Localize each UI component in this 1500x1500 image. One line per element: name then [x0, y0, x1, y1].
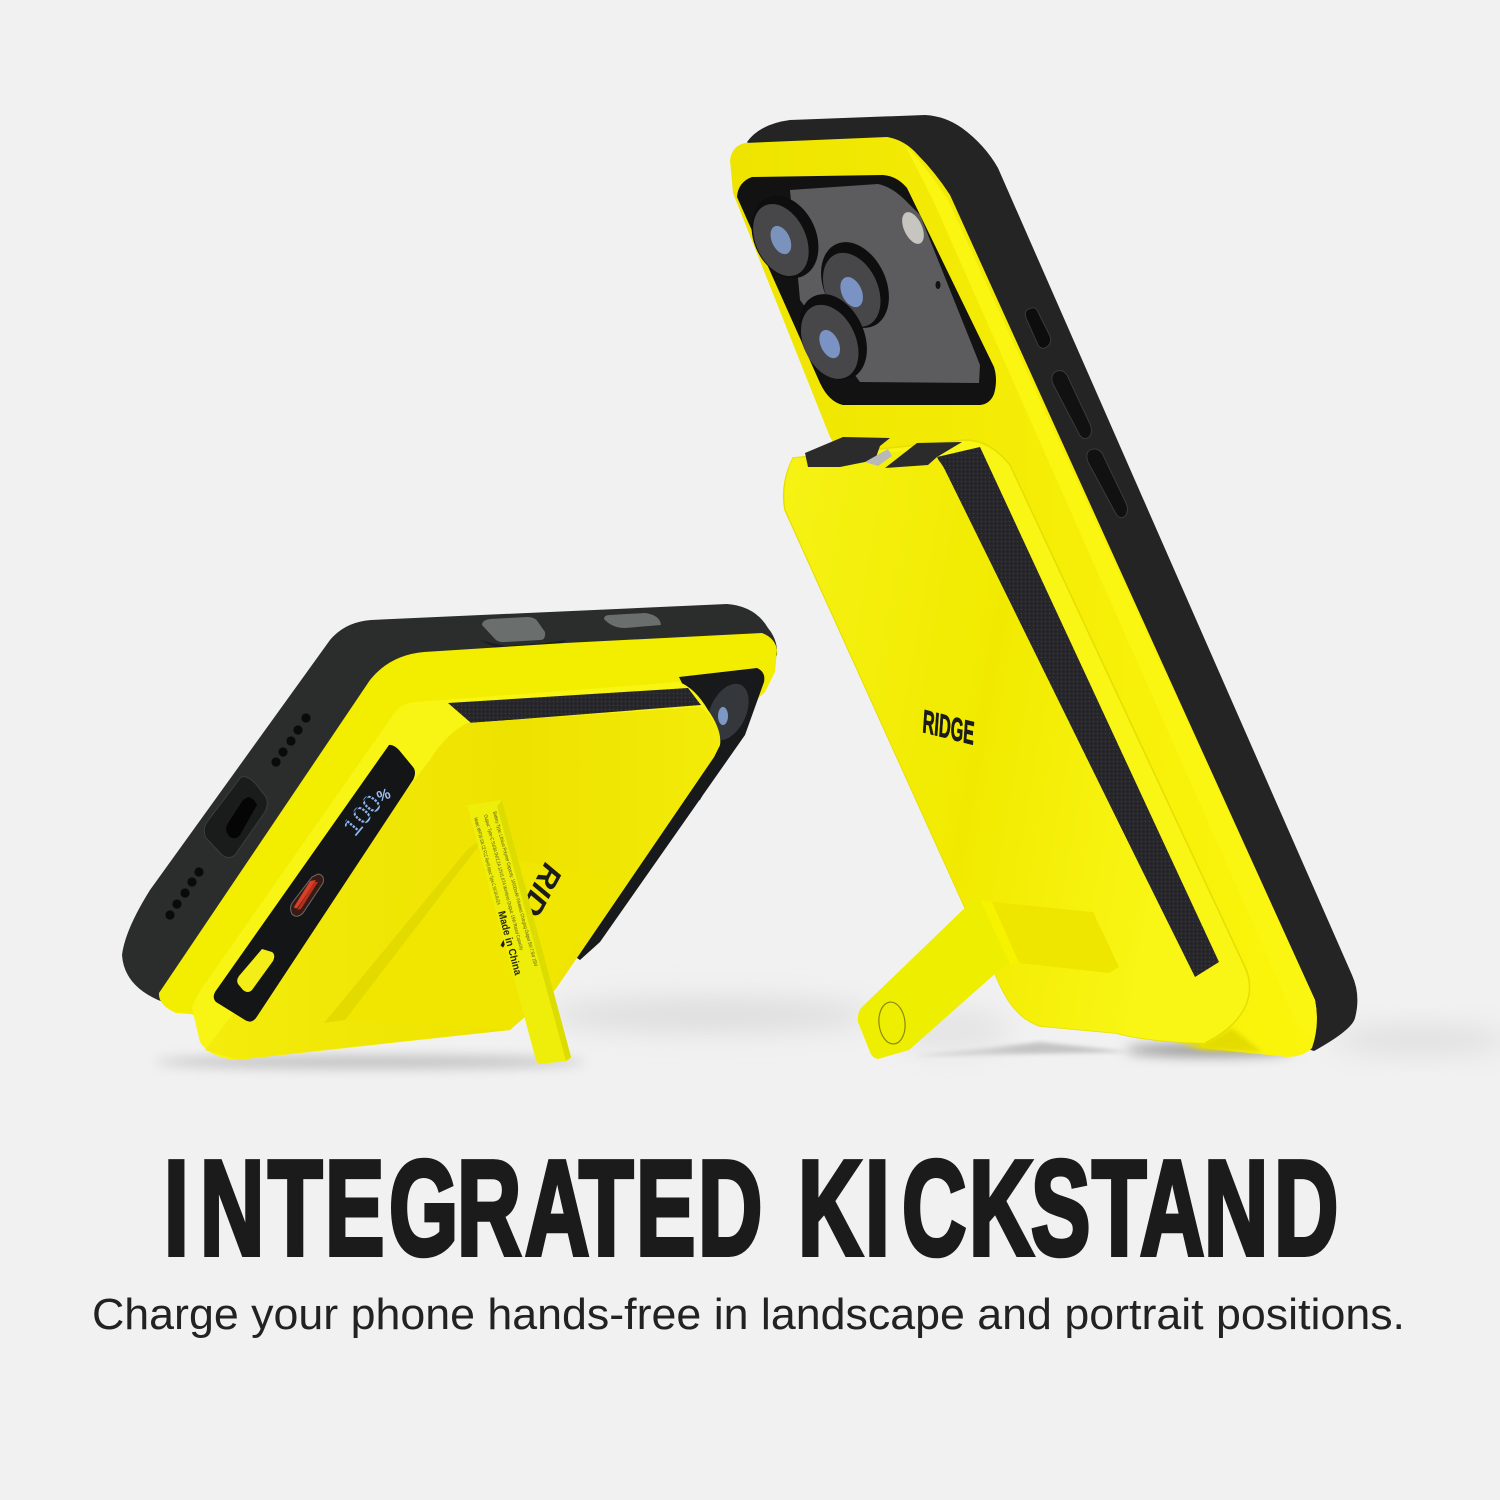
side button 2	[1052, 371, 1092, 439]
outer rim	[784, 440, 1250, 1043]
power button	[237, 949, 274, 992]
charging port	[204, 777, 267, 858]
yellow case back	[730, 137, 1317, 1057]
kickstand	[858, 900, 1016, 1059]
top button 2	[604, 613, 661, 628]
brand logo: RIDGE	[922, 703, 975, 752]
camera lens	[699, 677, 757, 747]
side button 1	[1025, 308, 1051, 348]
speaker holes top	[271, 713, 311, 767]
kickstand hinge	[980, 900, 1019, 964]
top lens	[739, 185, 831, 289]
mesh band	[448, 688, 701, 723]
USB-C glow	[294, 880, 316, 908]
landscape device: phone case	[122, 604, 777, 1040]
top face	[205, 707, 720, 1060]
lens blue	[718, 707, 728, 725]
top button 1	[482, 617, 545, 642]
front face	[785, 450, 1207, 1043]
landscape device: power bank	[192, 682, 720, 1060]
kickstand recess shading	[324, 835, 487, 1023]
regulatory fine print: Model: MFP20-10K CE FCC RoHS Input: Type-C 5V/3A 9V/2A	[472, 817, 501, 906]
button surround	[480, 640, 566, 650]
bank outer shell	[192, 682, 720, 1060]
side button 3	[1087, 449, 1128, 518]
yellow case back	[159, 633, 777, 1040]
regulatory fine print	[472, 811, 538, 967]
port opening	[226, 797, 257, 838]
title: INTEGRATED KICKSTAND	[164, 1133, 1338, 1284]
camera corner	[565, 668, 764, 960]
kickstand circle	[877, 1001, 907, 1045]
landscape device: kickstand	[467, 800, 571, 1064]
percent sign: %	[375, 785, 393, 806]
black case	[122, 604, 777, 1012]
display panel	[214, 745, 415, 1022]
clip connector	[865, 449, 892, 466]
regulatory fine print: Output: Type-C 5V/3A 9V/2.2A 12V/1.67A Wireless Output: 15W Rated Capacity	[482, 814, 524, 951]
clip 2	[885, 442, 962, 468]
floor shadows	[155, 999, 1500, 1068]
regulatory fine print: Battery Type: Lithium Polymer Capacity: 10000mAh Wireless Charging Output 5W 7.5W 15W	[491, 811, 538, 967]
portrait device: camera module	[737, 175, 996, 405]
lower front highlight	[345, 850, 620, 1030]
mesh band	[937, 447, 1219, 977]
subtitle: Charge your phone hands-free in landscape and portrait positions.	[92, 1290, 1405, 1339]
lower lens	[786, 283, 880, 391]
portrait device: power bank	[784, 437, 1250, 1059]
made in China label: Made in China	[495, 910, 524, 977]
USB-C port	[290, 874, 323, 916]
microphone dot	[936, 281, 940, 289]
flash	[898, 209, 928, 247]
logo partly behind stand: RIDGE	[495, 855, 566, 963]
middle lens	[808, 231, 902, 339]
battery digits: 100	[336, 789, 388, 841]
portrait device: phone case	[730, 115, 1357, 1057]
battery contact shadow on case	[1180, 1028, 1262, 1052]
kickstand recess	[992, 902, 1119, 973]
speaker holes bottom	[165, 867, 204, 920]
camera glass	[790, 184, 980, 383]
black case side	[747, 115, 1357, 1051]
clip 1	[805, 437, 890, 467]
